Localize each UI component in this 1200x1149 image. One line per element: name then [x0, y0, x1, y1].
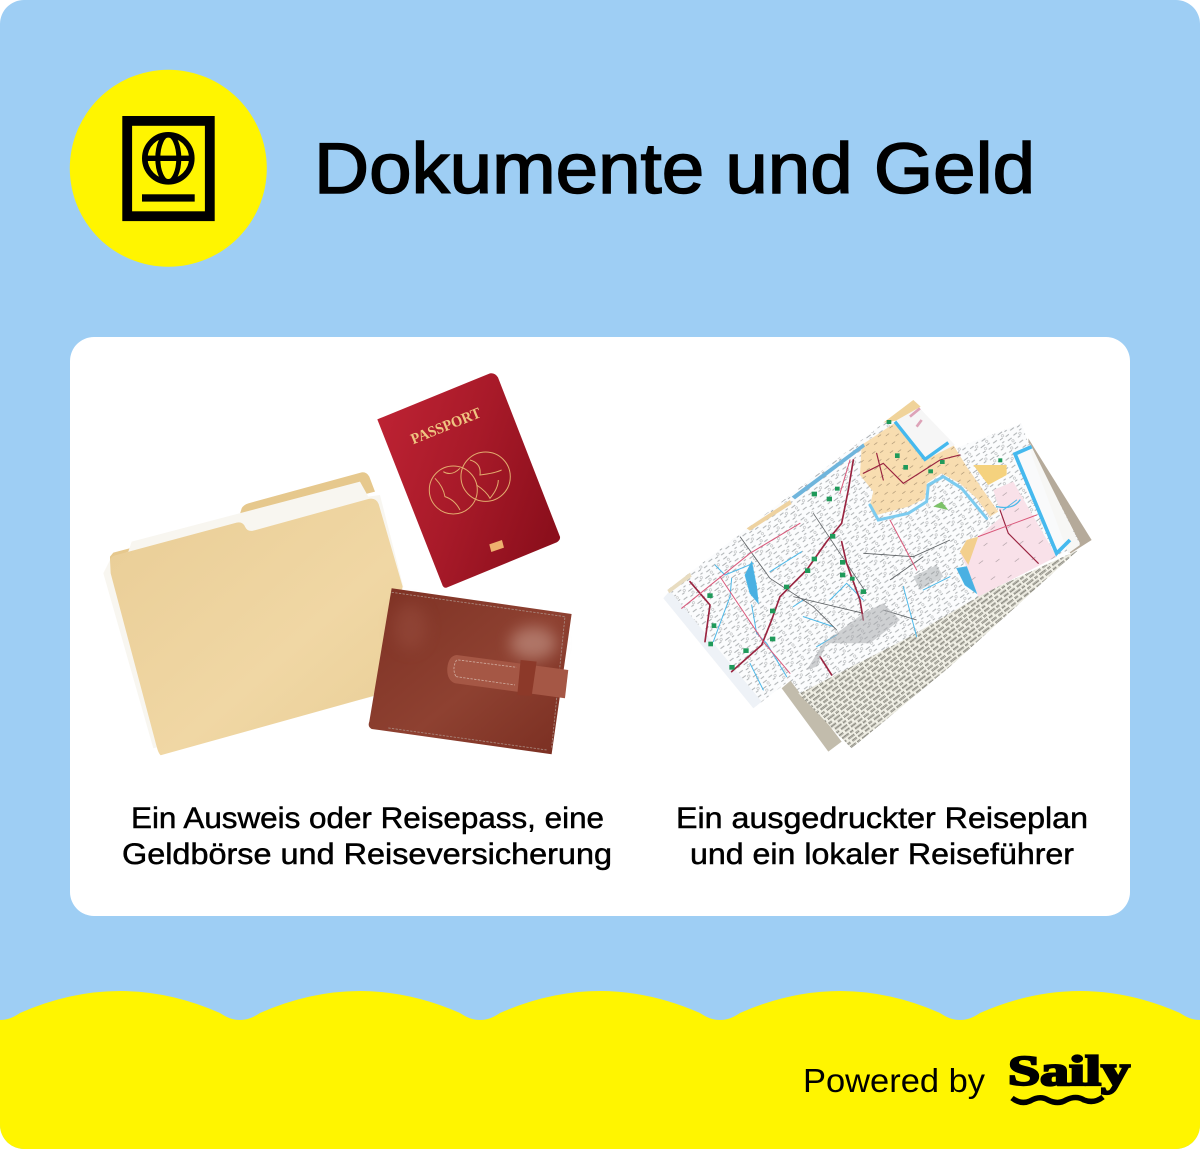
footer credit text: Powered by — [803, 1062, 986, 1099]
panel: white card — [70, 337, 1130, 916]
map green park — [933, 502, 948, 510]
map city clusters — [807, 603, 900, 670]
map yellow city — [960, 537, 978, 565]
folder front — [110, 499, 403, 755]
caption: documents — [122, 802, 612, 871]
map index paper — [798, 550, 1078, 748]
map main roads — [682, 453, 1038, 675]
caption: map — [676, 802, 1088, 871]
map pink region — [960, 482, 1057, 597]
map water and rivers — [713, 477, 1020, 690]
image: folded road map — [663, 400, 1092, 752]
wallet strap loop — [517, 660, 537, 696]
folder papers — [103, 482, 403, 748]
caption: map: und ein lokaler Reiseführer — [690, 838, 1074, 871]
map second panel — [955, 423, 1080, 597]
wallet highlight — [510, 627, 557, 660]
map top blue edge — [792, 443, 865, 499]
map strip right — [1030, 443, 1080, 553]
passport — [377, 373, 560, 588]
logo: Saily: Saily — [1008, 1049, 1130, 1095]
map green route shields — [707, 420, 1002, 670]
wallet — [369, 588, 572, 754]
wallet strap — [447, 655, 568, 698]
map left white edge — [663, 591, 762, 708]
map dark roads — [740, 513, 950, 630]
map grey back cover — [1028, 438, 1092, 553]
map orange city — [973, 465, 1007, 485]
caption: documents: Ein Ausweis oder Reisepass, eine — [131, 802, 604, 835]
map white inset — [1015, 445, 1071, 553]
caption: map: Ein ausgedruckter Reiseplan — [676, 802, 1088, 835]
wallet stitching — [388, 592, 565, 750]
icon: passport in yellow circle — [70, 70, 267, 267]
map top corner — [895, 402, 955, 460]
passport lettering: PASSPORT — [408, 405, 483, 448]
map main panel — [667, 400, 998, 708]
title: Dokumente und Geld — [314, 130, 1035, 209]
passport chip — [489, 540, 504, 552]
footer wave band — [0, 991, 1200, 1149]
folder back with tab — [110, 472, 375, 560]
logo: Saily — [1008, 1049, 1130, 1102]
caption: documents: Geldbörse und Reiseversicherung — [122, 838, 612, 871]
map inset border — [1015, 447, 1070, 553]
passport globes — [429, 452, 510, 514]
image: folder, passport and wallet — [103, 373, 572, 755]
map orange region — [860, 422, 998, 517]
